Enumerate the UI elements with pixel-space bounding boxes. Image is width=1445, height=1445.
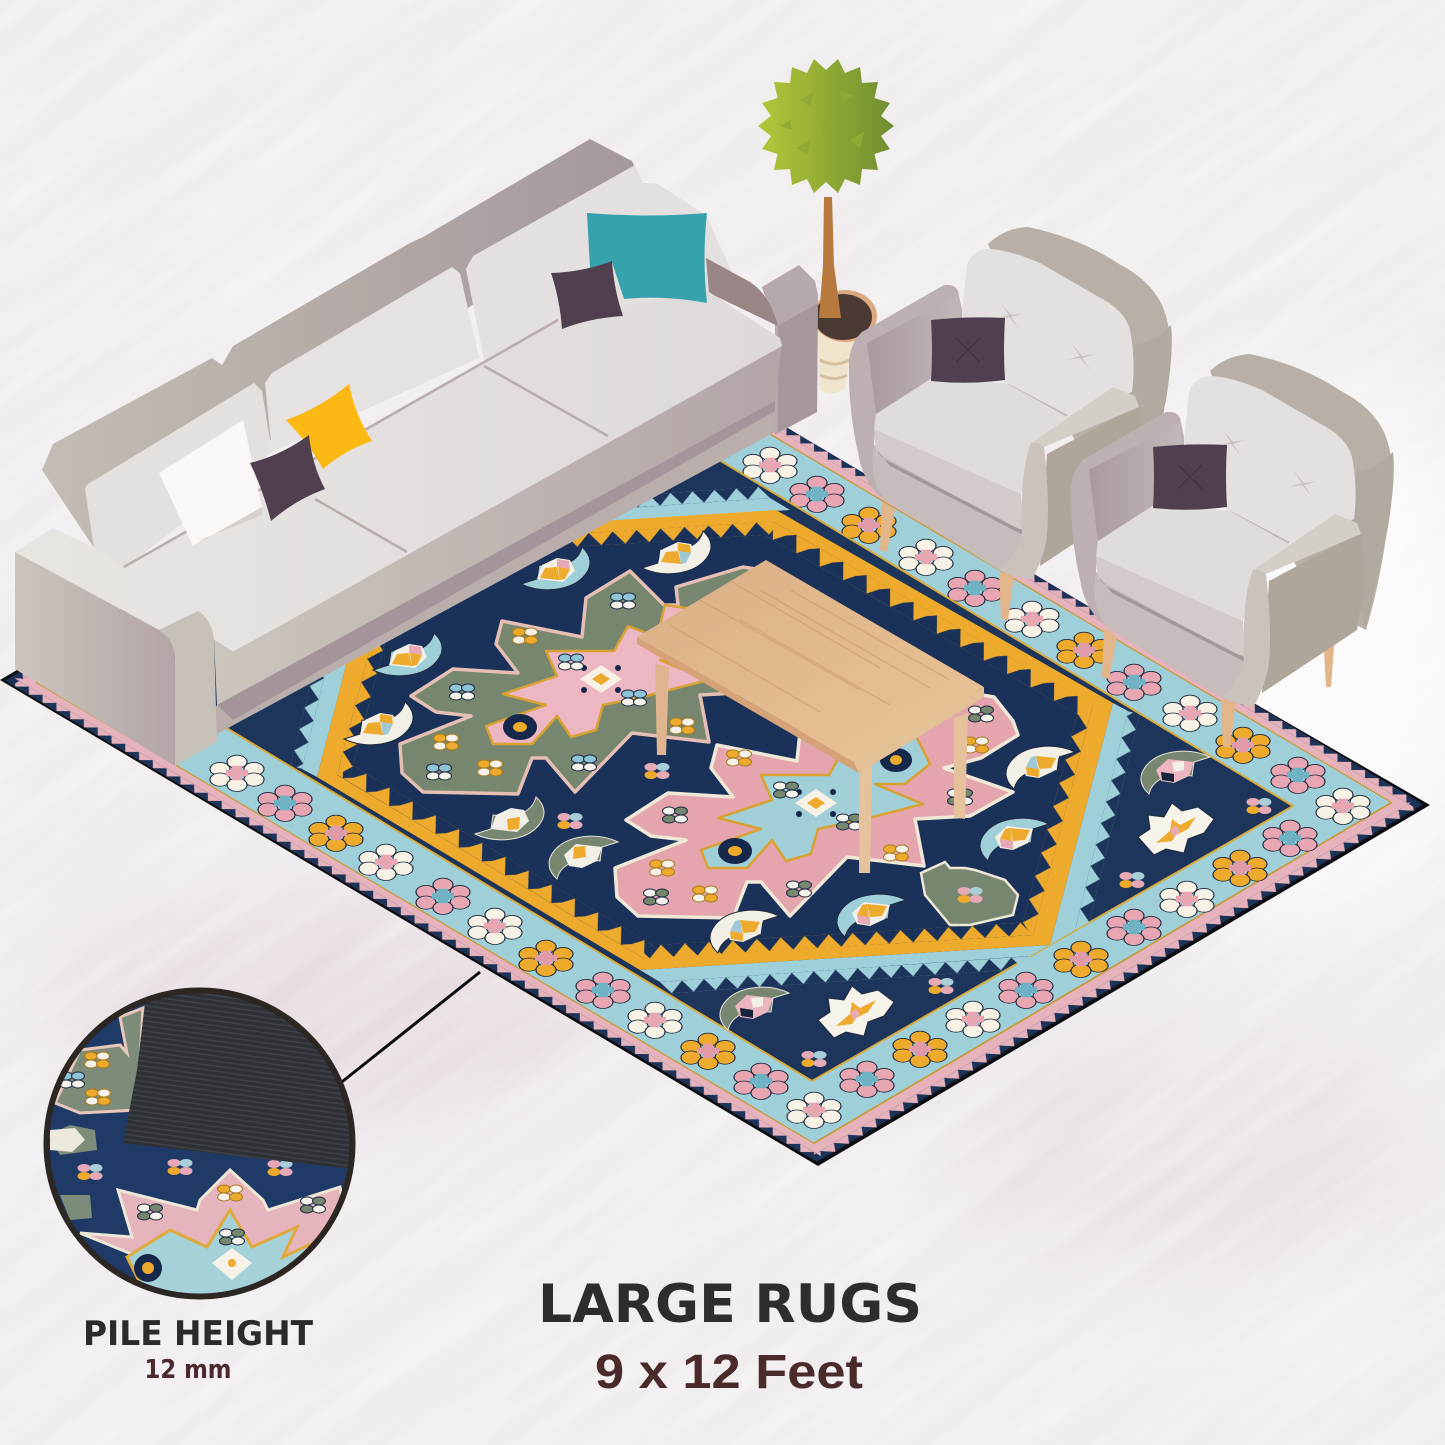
right arm xyxy=(762,265,818,435)
central hexagon frame xyxy=(290,486,1140,994)
rug outer edge xyxy=(0,325,1430,1166)
armchair two xyxy=(1071,354,1394,748)
armchair one xyxy=(849,227,1172,621)
pillow white xyxy=(159,420,262,546)
pillow yellow xyxy=(286,384,372,469)
base xyxy=(175,401,775,766)
sofa xyxy=(15,139,818,766)
connector line from rug to inset xyxy=(338,972,480,1085)
border flowers xyxy=(210,447,1370,1128)
rug borders xyxy=(4,323,1424,1162)
seat front xyxy=(214,342,782,705)
pillow dark right xyxy=(551,261,623,329)
green medallion xyxy=(400,567,803,794)
rug xyxy=(0,323,1430,1166)
seat top xyxy=(15,290,782,652)
back cushions xyxy=(85,383,272,569)
potted plant xyxy=(758,59,894,394)
seat lines xyxy=(124,320,608,567)
pillow teal xyxy=(587,213,707,303)
pillow dark left xyxy=(250,435,325,521)
folded rug backing xyxy=(123,990,353,1168)
inset detail circle xyxy=(46,990,353,1297)
left arm front xyxy=(159,611,217,766)
sofa back ridge xyxy=(42,139,645,548)
coffee table xyxy=(637,560,984,873)
rug field xyxy=(137,399,1293,1081)
title: LARGE RUGS xyxy=(538,1274,922,1335)
inner arm xyxy=(706,258,778,326)
label: 12 mm: 12 mm xyxy=(144,1355,232,1385)
left arm side xyxy=(15,552,175,766)
pink medallion xyxy=(615,691,1018,918)
crescents and field motifs xyxy=(344,531,1272,1067)
label: pile height: PILE HEIGHT xyxy=(83,1314,314,1354)
subtitle: size: 9 x 12 Feet xyxy=(595,1346,863,1399)
